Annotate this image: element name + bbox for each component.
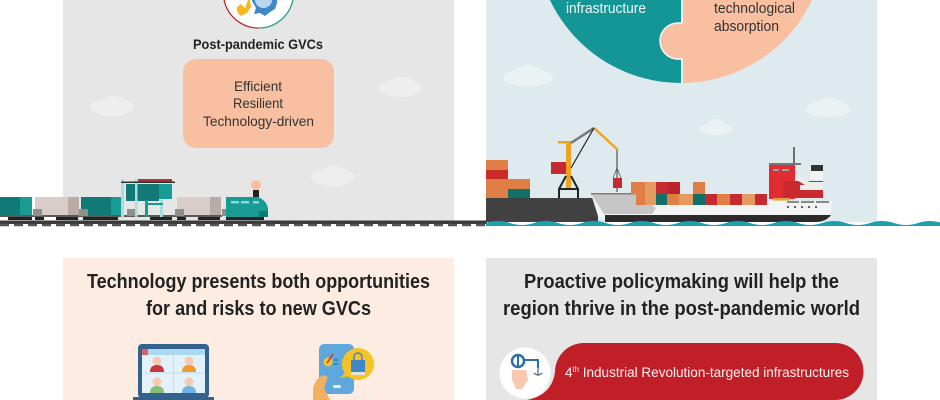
icon: key and anchor in hand (500, 348, 550, 398)
puzzle: peach half: technological (714, 0, 795, 17)
pill: infrastructure policy (527, 343, 864, 400)
puzzle: teal half (536, 0, 681, 83)
pill: infrastructure policy: Industrial Revolution-targeted infrastructures (579, 364, 849, 380)
cloud right (379, 77, 423, 97)
train with containers and gantry (0, 179, 268, 220)
pill: infrastructure policy: th (573, 365, 579, 374)
pill: infrastructure policy: 4 (565, 364, 573, 380)
icon: wrench and gear badge (224, 0, 294, 28)
heading: technology: for and risks to new GVCs (146, 298, 371, 320)
panel: technology opportunities and risks (63, 258, 454, 400)
deck containers (631, 182, 767, 205)
box: GVC qualities (183, 59, 334, 148)
cloud centre (699, 119, 733, 135)
heading: proactive policymaking (503, 271, 860, 320)
panel: post-pandemic GVCs (63, 0, 454, 221)
puzzle: peach half: absorption (714, 18, 779, 35)
cloud left (90, 96, 134, 116)
locomotive (226, 180, 268, 217)
port dock with stacked containers (486, 160, 598, 222)
puzzle: peach half (660, 0, 826, 83)
heading: technology: Technology presents both opportunities (87, 271, 430, 293)
ship bridge (769, 147, 829, 208)
heading: technology (87, 271, 430, 320)
heading: post-pandemic GVCs: Post-pandemic GVCs (193, 36, 323, 52)
panel: proactive policymaking (486, 258, 877, 400)
port crane (551, 128, 622, 198)
gantry crane (121, 179, 175, 218)
cloud left (503, 65, 553, 86)
box: GVC qualities: Resilient (233, 95, 283, 111)
box: GVC qualities: Technology-driven (203, 113, 314, 129)
icon: laptop video call (133, 344, 214, 400)
puzzle: teal half: infrastructure (566, 0, 646, 17)
heading: proactive policymaking: region thrive in the post-pandemic world (503, 298, 860, 320)
heading: proactive policymaking: Proactive policymaking will help the (524, 271, 839, 293)
container ship (591, 147, 832, 222)
cloud lower (311, 166, 355, 186)
panel: sea port (486, 0, 877, 222)
cloud right (806, 98, 850, 118)
icon: phone with security lock (313, 344, 374, 400)
sea waves (486, 221, 940, 226)
box: GVC qualities: Efficient (234, 78, 282, 94)
railway track (0, 220, 487, 225)
